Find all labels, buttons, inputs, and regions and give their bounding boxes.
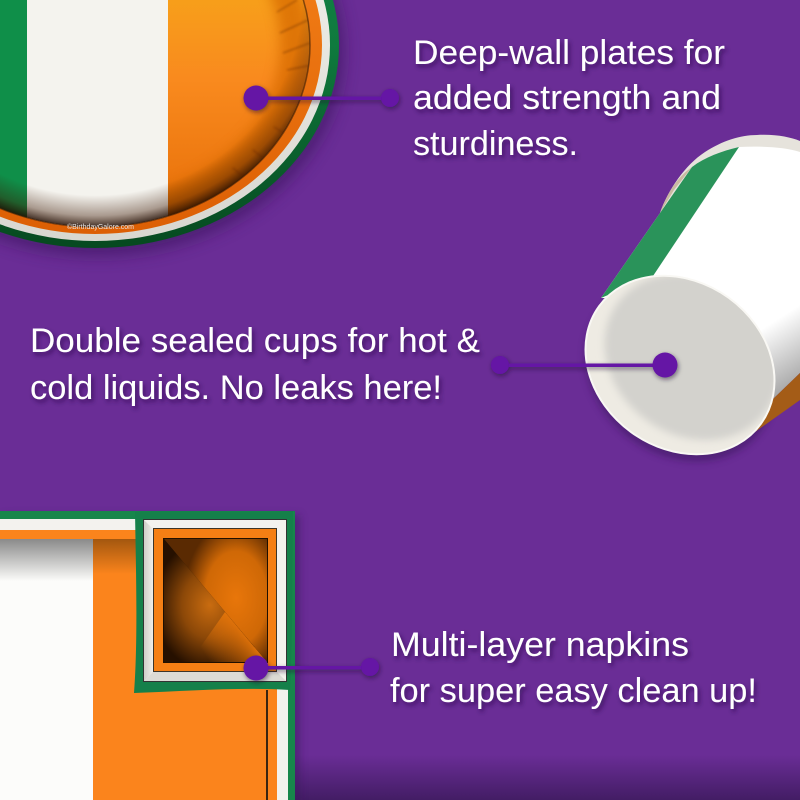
plate copyright: ©BirthdayGalore.com xyxy=(67,223,134,231)
plate white rim xyxy=(0,0,330,241)
text: cups: Double sealed cups for hot & xyxy=(30,322,480,360)
napkin fold white xyxy=(144,520,286,681)
napkin fold inner dark xyxy=(163,538,268,663)
napkin fold triangle left xyxy=(164,539,267,662)
napkin fold bottom bevel xyxy=(144,672,286,681)
bottom vignette xyxy=(0,755,800,800)
cup rim beige inside xyxy=(660,167,692,213)
napkin fold dark line xyxy=(153,528,277,672)
napkin orange top shade xyxy=(93,539,137,574)
cup green stripe xyxy=(601,147,739,298)
text: plates xyxy=(413,34,725,163)
napkin fold left bevel xyxy=(144,520,153,681)
napkin orange border xyxy=(0,530,277,800)
text: plates: Deep-wall plates for xyxy=(413,34,725,72)
napkin body white xyxy=(0,539,93,800)
plate shadow xyxy=(0,0,344,256)
plate well stripes xyxy=(0,0,318,235)
callout: cups connector xyxy=(491,352,678,378)
cup base xyxy=(550,239,800,491)
plate well edge xyxy=(0,0,310,227)
text: plates: added strength and xyxy=(413,79,721,117)
napkin shadow xyxy=(4,515,300,800)
napkin fold orange xyxy=(154,529,276,671)
cup body xyxy=(601,147,800,400)
napkin fold triangle right xyxy=(164,539,267,662)
plate orange rim xyxy=(0,0,322,234)
callout: plates connector xyxy=(244,86,399,110)
napkin inner line xyxy=(266,690,268,800)
plate xyxy=(0,0,344,256)
cup xyxy=(583,134,800,464)
napkin fold green xyxy=(134,511,293,693)
callout: napkins connector xyxy=(244,656,379,680)
plate wall creases xyxy=(233,0,312,180)
napkin fold lower flap xyxy=(190,612,267,662)
plate green rim xyxy=(0,0,339,248)
text: cups: cold liquids. No leaks here! xyxy=(30,369,442,407)
text: cups xyxy=(30,322,480,407)
cup shadow xyxy=(550,246,800,498)
napkin white border xyxy=(0,519,288,800)
text: napkins: for super easy clean up! xyxy=(390,672,757,710)
napkin white top shade xyxy=(0,539,93,581)
cup base inner xyxy=(603,276,774,442)
napkin xyxy=(0,511,300,800)
napkin fold line xyxy=(143,519,287,682)
cup orange stripe xyxy=(755,373,800,432)
text: napkins: Multi-layer napkins xyxy=(391,626,689,664)
napkin body orange xyxy=(93,539,267,800)
cup rim back xyxy=(660,135,800,300)
text: napkins xyxy=(390,626,757,710)
text: plates: sturdiness. xyxy=(413,125,578,163)
napkin green border xyxy=(0,511,295,800)
